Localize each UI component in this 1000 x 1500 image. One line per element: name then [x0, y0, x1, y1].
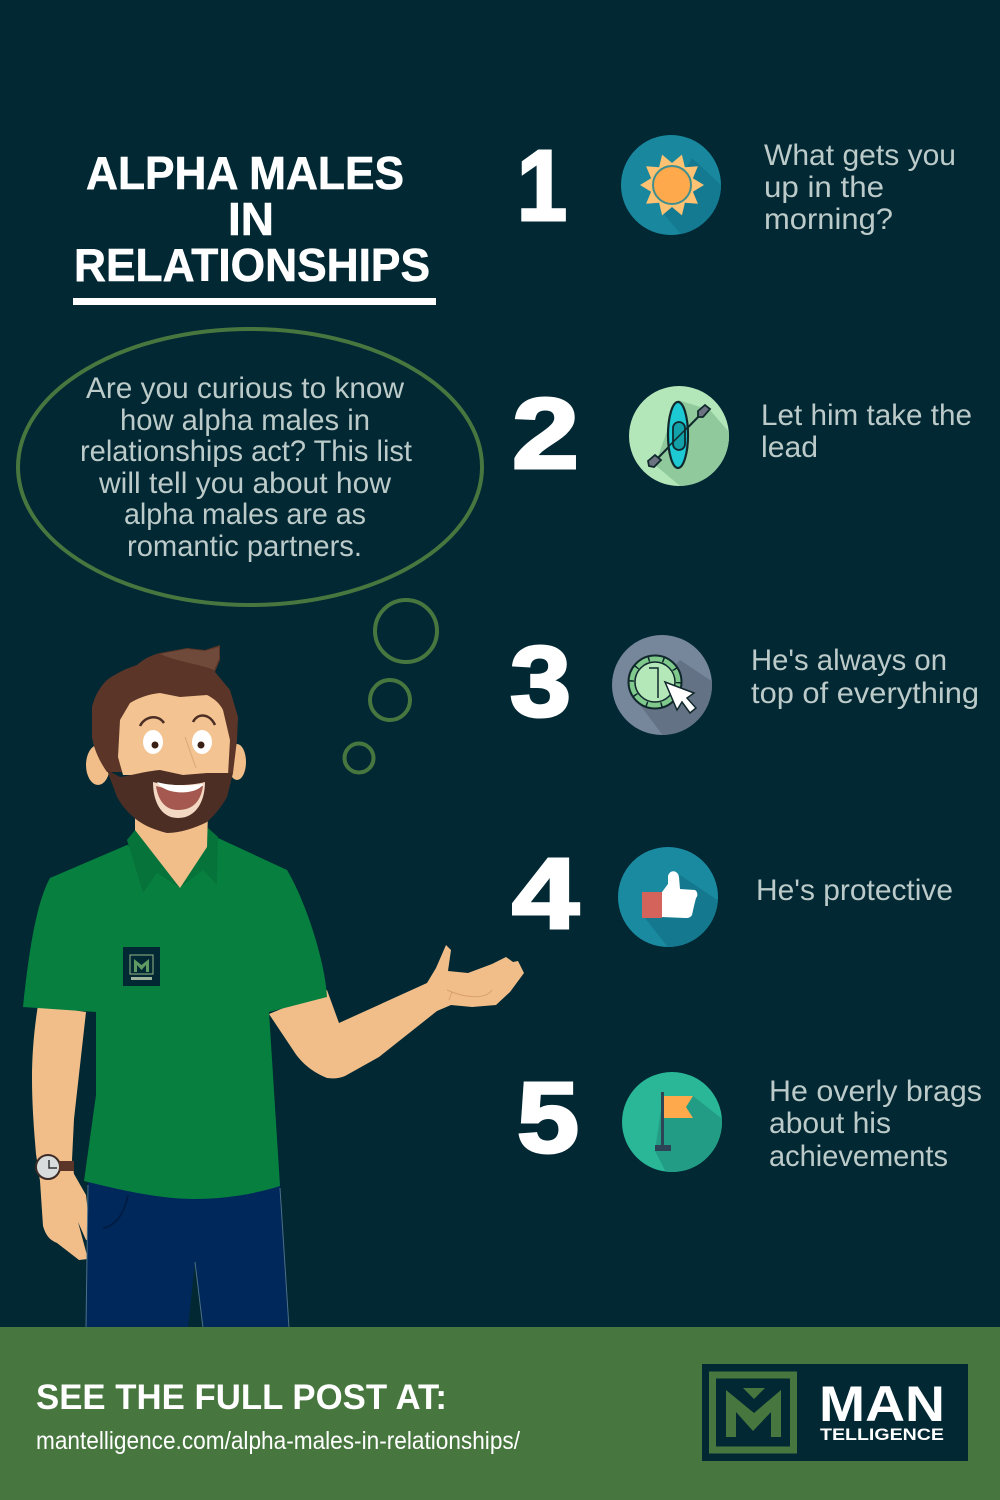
- face: [118, 693, 230, 775]
- intro text: Are you curious to know: [86, 372, 404, 405]
- Mantelligence logo: [702, 1364, 968, 1461]
- item text 1: What gets you: [764, 139, 956, 172]
- icon: kayak: [629, 386, 729, 486]
- intro text: will tell you about how: [98, 467, 391, 500]
- neck: [135, 812, 208, 888]
- Mantelligence logo: TELLIGENCE: [820, 1426, 944, 1444]
- item text 3: He's always on: [751, 644, 947, 677]
- beard: [107, 770, 233, 833]
- item text 2: lead: [761, 431, 818, 464]
- item text 5: He overly brags: [769, 1075, 982, 1108]
- title: [73, 147, 436, 305]
- item text 4: He's protective: [756, 874, 953, 907]
- item text 1: up in the: [764, 171, 884, 204]
- footer call to action: SEE THE FULL POST AT:: [36, 1378, 447, 1417]
- item text 2: [761, 399, 972, 464]
- pants: [86, 1180, 289, 1328]
- numbers: 4: [512, 838, 579, 950]
- icon: flag: [622, 1072, 722, 1172]
- title: ALPHA MALES: [86, 147, 404, 199]
- numbers: 1: [517, 130, 567, 242]
- numbers: 3: [510, 626, 571, 738]
- hair: [92, 645, 238, 773]
- item text 3: [751, 644, 979, 710]
- footer call to action: [36, 1378, 520, 1455]
- Mantelligence logo: MAN: [819, 1376, 945, 1432]
- intro text: relationships act? This list: [80, 435, 413, 468]
- right arm and hand: [269, 945, 524, 1078]
- item text 5: about his: [769, 1107, 891, 1140]
- intro text: romantic partners.: [127, 530, 362, 563]
- icon: thumbs up: [618, 847, 725, 950]
- item text 1: morning?: [764, 203, 893, 236]
- left arm with watch: [32, 1005, 91, 1260]
- item text 3: top of everything: [751, 677, 979, 710]
- thought bubble: [18, 329, 482, 772]
- numbers: 5: [517, 1062, 579, 1174]
- title: RELATIONSHIPS: [74, 239, 430, 291]
- intro text: alpha males are as: [124, 498, 366, 531]
- hair highlight: [160, 647, 219, 670]
- footer band: [0, 1327, 1000, 1500]
- footer call to action: mantelligence.com/alpha-males-in-relationships/: [36, 1427, 520, 1455]
- shirt logo badge: [123, 947, 160, 986]
- item text 1: [764, 139, 956, 236]
- icon: number one chip and cursor: [612, 635, 712, 735]
- item text 2: Let him take the: [761, 399, 972, 432]
- eyes: [140, 716, 215, 768]
- icon: sun: [621, 135, 721, 235]
- item text 5: achievements: [769, 1140, 948, 1173]
- mouth: [153, 782, 205, 818]
- title: IN: [228, 193, 274, 245]
- man character: [23, 645, 524, 1328]
- numbers: [510, 130, 579, 1174]
- numbers: 2: [512, 378, 579, 490]
- intro text: [80, 372, 413, 563]
- head: [86, 645, 246, 833]
- green shirt: [23, 828, 327, 1199]
- item text 5: [769, 1075, 982, 1173]
- intro text: how alpha males in: [120, 404, 370, 437]
